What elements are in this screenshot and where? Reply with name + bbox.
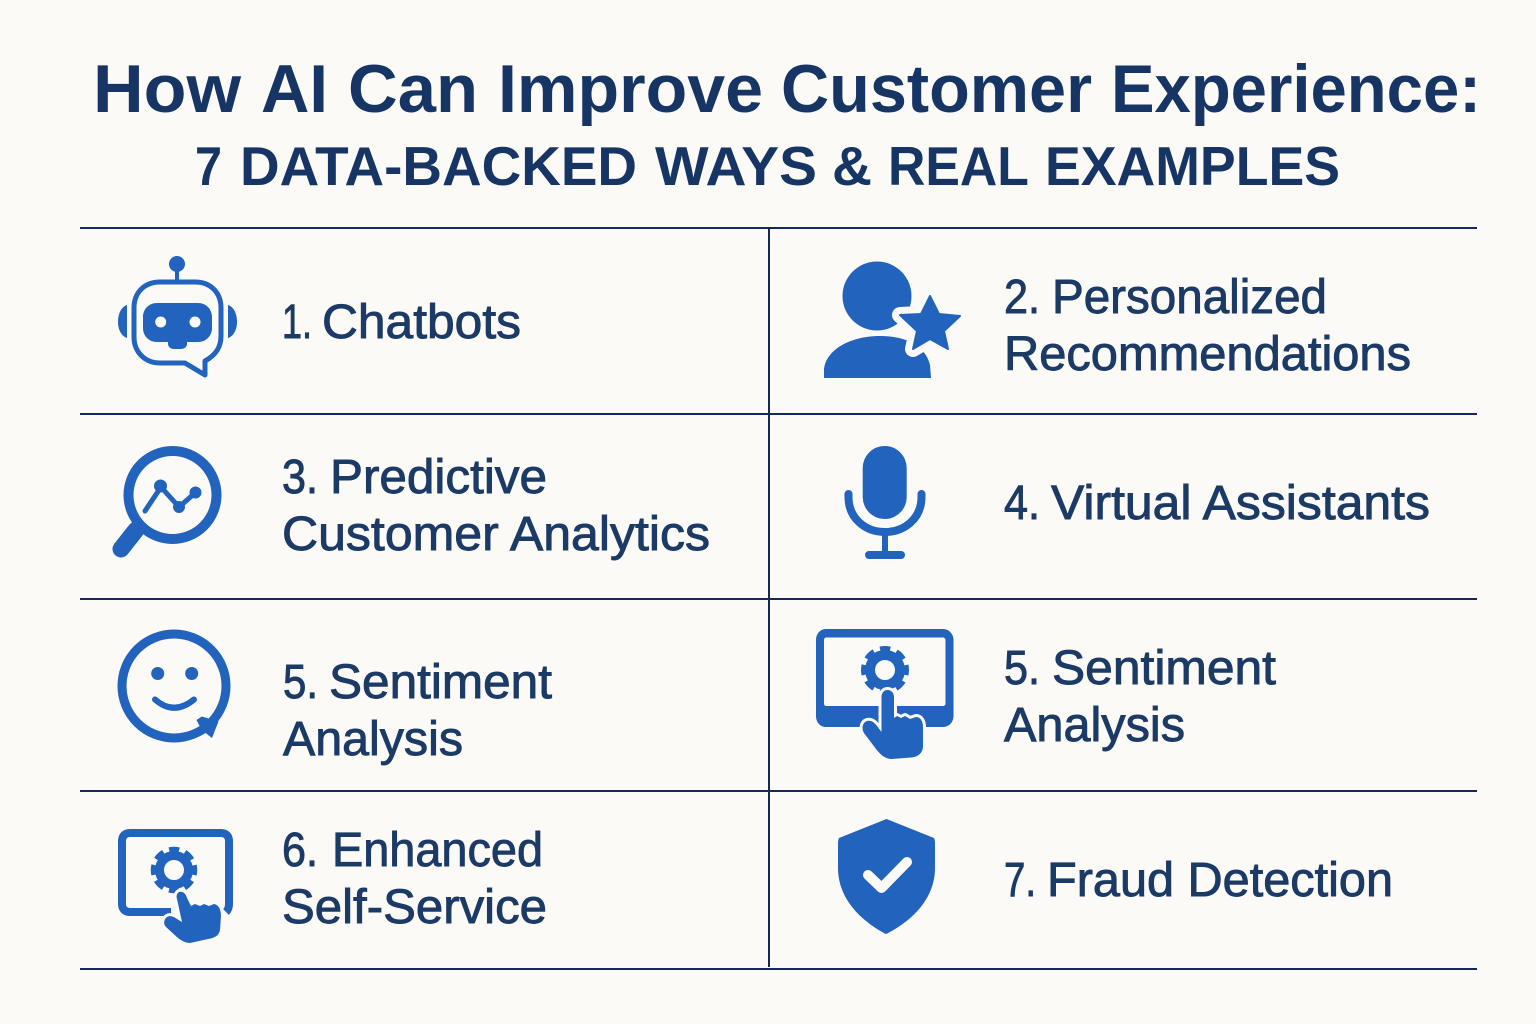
label: fraud detection: 7. <box>1004 854 1036 907</box>
icon: smiley with arrow <box>122 634 226 738</box>
title: Improve <box>498 51 763 127</box>
label: virtual assistants: Virtual Assistants <box>1051 477 1430 530</box>
title: Customer <box>781 51 1092 127</box>
panel: enhanced self-service <box>122 824 547 943</box>
icon: microphone <box>848 446 922 559</box>
panel: personalized recommendations <box>824 262 1411 381</box>
label: fraud detection: Fraud Detection <box>1047 854 1393 907</box>
subtitle: REAL <box>888 135 1028 197</box>
icon: person with star <box>824 262 960 378</box>
label: enhanced self-service: Self-Service <box>282 881 547 934</box>
label: sentiment analysis right: 5. <box>1004 642 1040 695</box>
subtitle: WAYS <box>655 135 817 197</box>
icon: touch screen with gear <box>816 629 954 759</box>
label: sentiment analysis right: Analysis <box>1004 699 1185 752</box>
title: Can <box>348 51 478 127</box>
panel: sentiment analysis right <box>816 629 1276 759</box>
panel: sentiment analysis left <box>122 634 552 766</box>
label: personalized recommendations: Personalized <box>1052 271 1327 324</box>
panel: fraud detection <box>838 819 1393 934</box>
subtitle: & <box>832 135 872 197</box>
label: sentiment analysis left: Analysis <box>283 713 463 766</box>
icon: magnifier with chart <box>121 451 216 549</box>
title: How <box>93 51 242 127</box>
label: predictive customer analytics: Predictive <box>330 451 547 504</box>
icon: shield with check <box>838 819 935 934</box>
label: predictive customer analytics: 3. <box>282 451 318 504</box>
title: Experience: <box>1111 51 1481 127</box>
label: chatbots: Chatbots <box>322 296 521 349</box>
label: sentiment analysis right: Sentiment <box>1052 642 1276 695</box>
label: sentiment analysis left: 5. <box>283 656 318 709</box>
icon: screen with gear and hand <box>122 833 229 943</box>
label: enhanced self-service: 6. <box>282 824 318 877</box>
label: personalized recommendations: Recommendations <box>1004 328 1411 381</box>
label: enhanced self-service: Enhanced <box>332 824 543 877</box>
label: predictive customer analytics: Customer Analytics <box>282 508 710 561</box>
subtitle: 7 <box>195 135 222 197</box>
panel: chatbots <box>118 256 521 375</box>
panel: virtual assistants <box>848 446 1430 559</box>
title: AI <box>261 51 328 127</box>
subtitle: EXAMPLES <box>1045 135 1340 197</box>
label: sentiment analysis left: Sentiment <box>329 656 552 709</box>
panel: predictive customer analytics <box>121 451 710 561</box>
label: chatbots: 1. <box>282 296 312 349</box>
subtitle: DATA-BACKED <box>240 135 637 197</box>
label: personalized recommendations: 2. <box>1004 271 1040 324</box>
icon: chatbot <box>118 256 237 375</box>
label: virtual assistants: 4. <box>1004 477 1040 530</box>
